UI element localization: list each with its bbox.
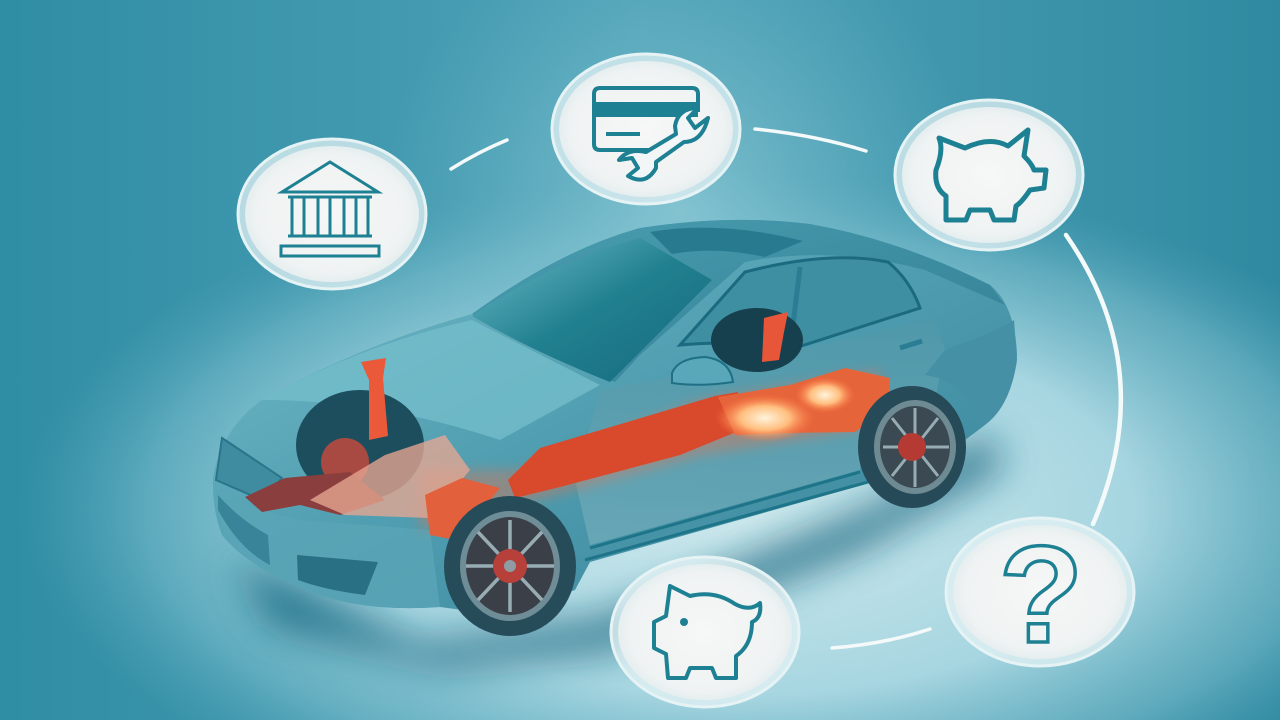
side windows [680, 258, 920, 348]
rear-left wheel seen through body [711, 308, 803, 372]
main tunnel [508, 392, 738, 498]
door handle [900, 341, 922, 348]
car [213, 220, 1017, 668]
sill stripes [585, 472, 868, 560]
front wheel arch [296, 390, 424, 500]
left assembly [245, 472, 385, 515]
orange glow [420, 370, 890, 530]
window pillar [790, 267, 800, 350]
hood highlight [262, 320, 600, 440]
door panel [575, 318, 945, 545]
engine translucent cover [310, 435, 470, 518]
front wheel [444, 496, 576, 636]
car body [213, 220, 1017, 615]
lower block [425, 478, 500, 540]
icon: question mark [946, 518, 1134, 672]
windshield [472, 238, 712, 382]
icon: piggy bank bottom [611, 557, 799, 707]
car ground shadow [235, 435, 1005, 668]
car roof [472, 220, 1005, 382]
rear wheel [858, 386, 966, 508]
exhaust and chassis parts [245, 312, 890, 540]
side mirror [672, 357, 733, 385]
front bumper and grille [216, 438, 282, 500]
front strut [361, 358, 388, 440]
icon: bank [238, 139, 426, 289]
hot catalyst [718, 368, 890, 435]
rear strut [762, 312, 788, 362]
lower front bumper tone [222, 500, 440, 608]
icon: question mark: ? [999, 518, 1083, 672]
hot glow [715, 394, 815, 442]
rear quarter [925, 320, 1017, 428]
sunroof [650, 228, 803, 257]
icon: piggy bank top right [895, 100, 1083, 250]
icon: card and wrench [552, 54, 740, 204]
connector arcs [451, 129, 1121, 648]
front brake [321, 438, 369, 486]
